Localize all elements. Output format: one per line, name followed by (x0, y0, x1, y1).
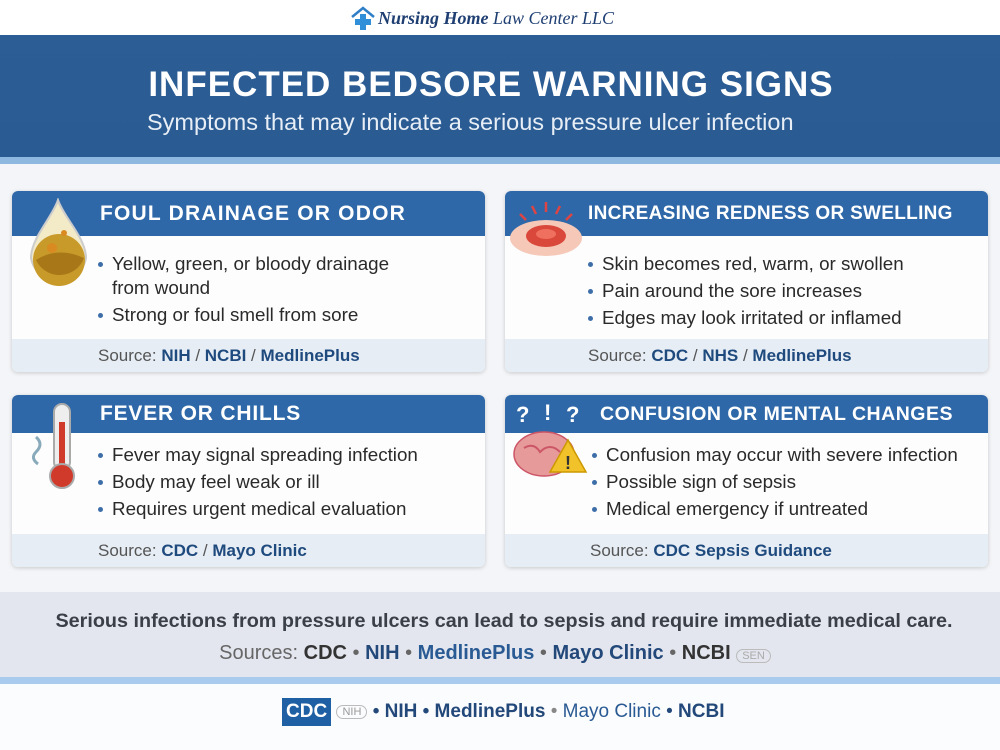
icon: brain warning: ! (544, 400, 551, 425)
source (12, 534, 485, 567)
source: Source: NIH / NCBI / MedlinePlus (98, 346, 360, 365)
bullets: Pain around the sore increases (602, 280, 862, 301)
bullets: from wound (112, 277, 210, 298)
panel: confusion (505, 395, 988, 567)
logo: Nursing Home Law Center LLC (378, 8, 614, 28)
heading (505, 395, 988, 433)
source: Source: CDC / NHS / MedlinePlus (588, 346, 852, 365)
icon: house cross (351, 6, 375, 30)
footer (0, 684, 1000, 750)
icon: red swelling (510, 202, 582, 256)
bullets: Body may feel weak or ill (112, 471, 320, 492)
icon: thermometer (32, 403, 75, 489)
icon: brain warning: ? (566, 402, 579, 427)
sources line: Sources: CDC • NIH • MedlinePlus • Mayo Clinic • NCBI SEN (219, 642, 765, 664)
subtitle: Symptoms that may indicate a serious pressure ulcer infection (147, 109, 794, 135)
bullets: Requires urgent medical evaluation (112, 498, 406, 519)
bullets (98, 253, 389, 325)
bullets: Medical emergency if untreated (606, 498, 868, 519)
source (505, 534, 988, 567)
title: INFECTED BEDSORE WARNING SIGNS (148, 65, 834, 104)
bullets: Fever may signal spreading infection (112, 444, 418, 465)
source: Source: CDC / Mayo Clinic (98, 541, 307, 560)
icon: drainage drop (30, 198, 87, 286)
footer logos: CDC (286, 701, 327, 722)
heading (12, 191, 485, 236)
panel: redness (505, 191, 988, 372)
bullets (588, 253, 904, 328)
heading: INCREASING REDNESS OR SWELLING (588, 203, 953, 224)
bullets: Edges may look irritated or inflamed (602, 307, 902, 328)
callout text: Serious infections from pressure ulcers can lead to sepsis and require immediate medical care. (55, 610, 953, 632)
bullets (592, 444, 958, 519)
bullets (98, 444, 418, 519)
heading: FEVER OR CHILLS (100, 402, 301, 425)
bullets: Skin becomes red, warm, or swollen (602, 253, 904, 274)
header banner (0, 35, 1000, 164)
heading: CONFUSION OR MENTAL CHANGES (600, 403, 953, 425)
bullets: Yellow, green, or bloody drainage (112, 253, 389, 274)
source (12, 339, 485, 372)
icon: brain warning (513, 400, 588, 477)
bullets: Confusion may occur with severe infection (606, 444, 958, 465)
source: Source: CDC Sepsis Guidance (590, 541, 832, 560)
icon: brain warning: ? (516, 402, 529, 427)
bottom callout (0, 592, 1000, 684)
footer logos (282, 698, 724, 726)
panel: fever (12, 395, 485, 567)
heading (505, 191, 988, 236)
logo bar (0, 0, 1000, 35)
panel: foul drainage (12, 191, 485, 372)
source (505, 339, 988, 372)
heading (12, 395, 485, 433)
footer logos: NIH • NIH • MedlinePlus • Mayo Clinic • NCBI (342, 701, 724, 722)
bullets: Possible sign of sepsis (606, 471, 796, 492)
bullets: Strong or foul smell from sore (112, 304, 358, 325)
heading: FOUL DRAINAGE OR ODOR (100, 202, 406, 225)
icon: brain warning: ! (565, 453, 571, 473)
